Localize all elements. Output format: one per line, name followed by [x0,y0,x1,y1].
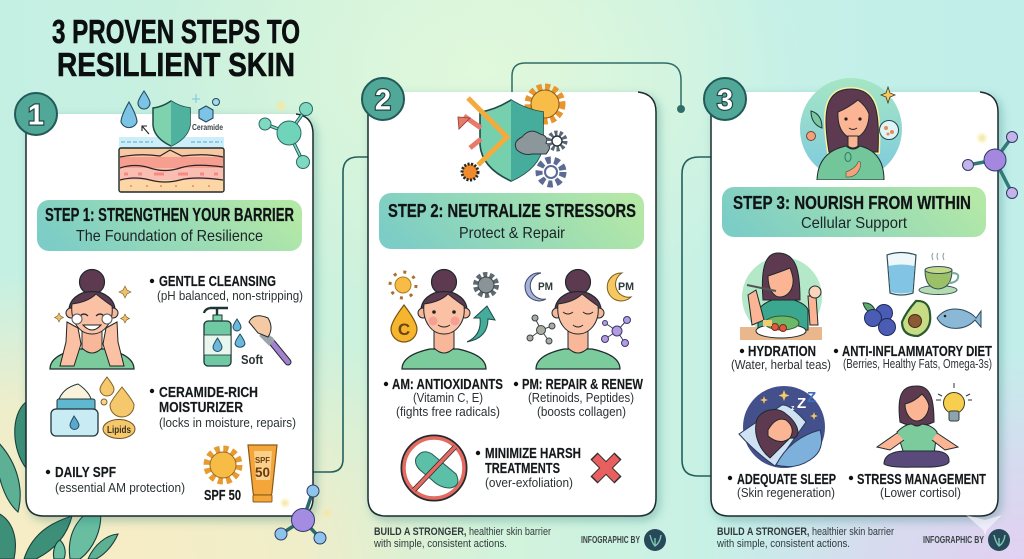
text: pm repair and renew: PM: REPAIR & RENEW [522,377,643,393]
band: step 3 heading [722,187,986,237]
band: step 2 heading: Protect & Repair [459,225,566,242]
band: step 2 heading: STEP 2: NEUTRALIZE STRESSORS [388,201,636,221]
text: am antioxidants [384,377,503,419]
title [52,13,300,83]
molecule teal [259,102,312,168]
title: 3 PROVEN STEPS TO [52,13,300,50]
badge: step 1 [15,93,57,135]
badge: step 3 [704,78,746,120]
text: stress management [849,472,986,500]
icon: woman with pm repair: PM [538,281,553,293]
icon: cleanser bottle and brush [204,308,288,367]
decorative leaves [0,402,118,559]
text: ceramide moisturizer: CERAMIDE-RICH [159,385,258,401]
footer: step 3 credit [923,515,1010,551]
title: RESILLIENT SKIN [57,46,295,83]
text: am antioxidants: (fights free radicals) [396,405,500,419]
molecule purple right [962,132,1018,198]
text: daily spf [46,465,185,495]
icon: blueberries avocado fish [863,301,981,336]
text: hydration [731,344,831,372]
footer: step 2 note [373,526,551,550]
icon: meditating woman [877,383,972,467]
text: minimize harsh treatments [476,446,581,490]
text: stress management: STRESS MANAGEMENT [857,472,986,488]
footer: step 3 note: BUILD A STRONGER, healthier skin barrier [717,526,894,538]
panel: step 3 [711,78,1018,516]
icon: water glass and tea [887,252,958,295]
badge: step 3: 3 [717,84,733,116]
panel: step 2 [368,87,656,516]
icon: cleanser bottle and brush: Soft [241,352,264,367]
text: hydration: (Water, herbal teas) [731,358,831,372]
icon: shield and stressors [458,87,565,184]
icon: cream jar and lipids [51,377,135,438]
icon: woman eating [740,253,822,340]
icon: skin barrier [119,91,224,192]
text: gentle cleansing: (pH balanced, non-stripping) [157,289,303,303]
icon: sleeping woman: Z [807,389,816,406]
text: stress management: (Lower cortisol) [880,486,961,500]
icon: woman with antioxidants [390,270,496,369]
badge: step 1: 1 [28,100,44,132]
icon: sun and sunscreen [204,445,277,504]
badge: step 2 [362,78,404,120]
text: ceramide moisturizer [150,385,296,430]
text: gentle cleansing [150,274,303,303]
icon: sleeping woman: z [791,405,795,412]
band: step 1 heading: STEP 1: STRENGTHEN YOUR BARRIER [45,205,294,225]
band: step 3 heading: Cellular Support [801,215,908,232]
icon: sleeping woman: Z [797,395,806,412]
text: minimize harsh treatments: (over-exfoliation) [485,476,573,490]
text: minimize harsh treatments: TREATMENTS [485,461,560,477]
connector: card 2 to card 3 [682,157,713,476]
text: pm repair and renew [514,377,643,419]
molecule purple bottom [275,485,330,544]
icon: sun and sunscreen: 50 [255,464,270,480]
icon: sun and sunscreen: SPF 50 [204,488,241,504]
band: step 2 heading [379,193,644,249]
band: step 1 heading [37,200,302,251]
band: step 3 heading: STEP 3: NOURISH FROM WITHIN [733,193,971,213]
footer: step 3 note: with simple, consistent actions. [716,538,850,550]
connector: card 1 to card 2 [310,157,370,472]
text: pm repair and renew: (boosts collagen) [537,405,626,419]
text: pm repair and renew: (Retinoids, Peptides) [528,391,634,405]
icon: woman with pm repair: PM [618,281,634,293]
footer: step 2 credit [581,529,666,551]
text: am antioxidants: AM: ANTIOXIDANTS [392,377,503,393]
text: daily spf: DAILY SPF [55,465,116,481]
text: adequate sleep [728,472,836,500]
text: adequate sleep: ADEQUATE SLEEP [737,472,836,488]
text: am antioxidants: (Vitamin C, E) [413,391,483,405]
text: hydration: HYDRATION [748,344,816,360]
footer: step 3 credit: INFOGRAPHIC BY [923,535,984,546]
badge: step 2: 2 [375,84,391,116]
icon: cream jar and lipids: Lipids [107,425,131,436]
footer: step 2 credit: INFOGRAPHIC BY [581,535,640,546]
text: daily spf: (essential AM protection) [55,481,185,495]
text: adequate sleep: (Skin regeneration) [737,486,835,500]
footer: step 2 note: BUILD A STRONGER, healthier skin barrier [374,526,551,538]
text: ceramide moisturizer: (locks in moisture, repairs) [159,416,296,430]
icon: woman with pm repair [525,270,634,369]
connector: top loop to dot [512,63,685,113]
panel: step 1 [26,91,313,516]
icon: no harsh scrub [403,437,465,499]
band: step 1 heading: The Foundation of Resilience [76,228,263,245]
icon: woman with antioxidants: C [398,320,410,339]
icon: sleeping woman [739,386,825,468]
icon: skin barrier: Ceramide [192,122,223,132]
icon: shield [153,101,190,146]
text: minimize harsh treatments: MINIMIZE HARSH [485,446,581,462]
icon: woman cleansing [50,270,134,369]
text: gentle cleansing: GENTLE CLEANSING [159,274,276,290]
icon: sun and sunscreen: SPF [255,456,270,465]
footer: step 3 note [716,526,894,550]
footer: step 2 note: with simple, consistent actions. [373,538,507,550]
icon: glowing woman [800,78,902,180]
text: anti-inflammatory diet [834,344,992,371]
text: ceramide moisturizer: MOISTURIZER [159,400,243,416]
icon: red cross [594,456,618,480]
